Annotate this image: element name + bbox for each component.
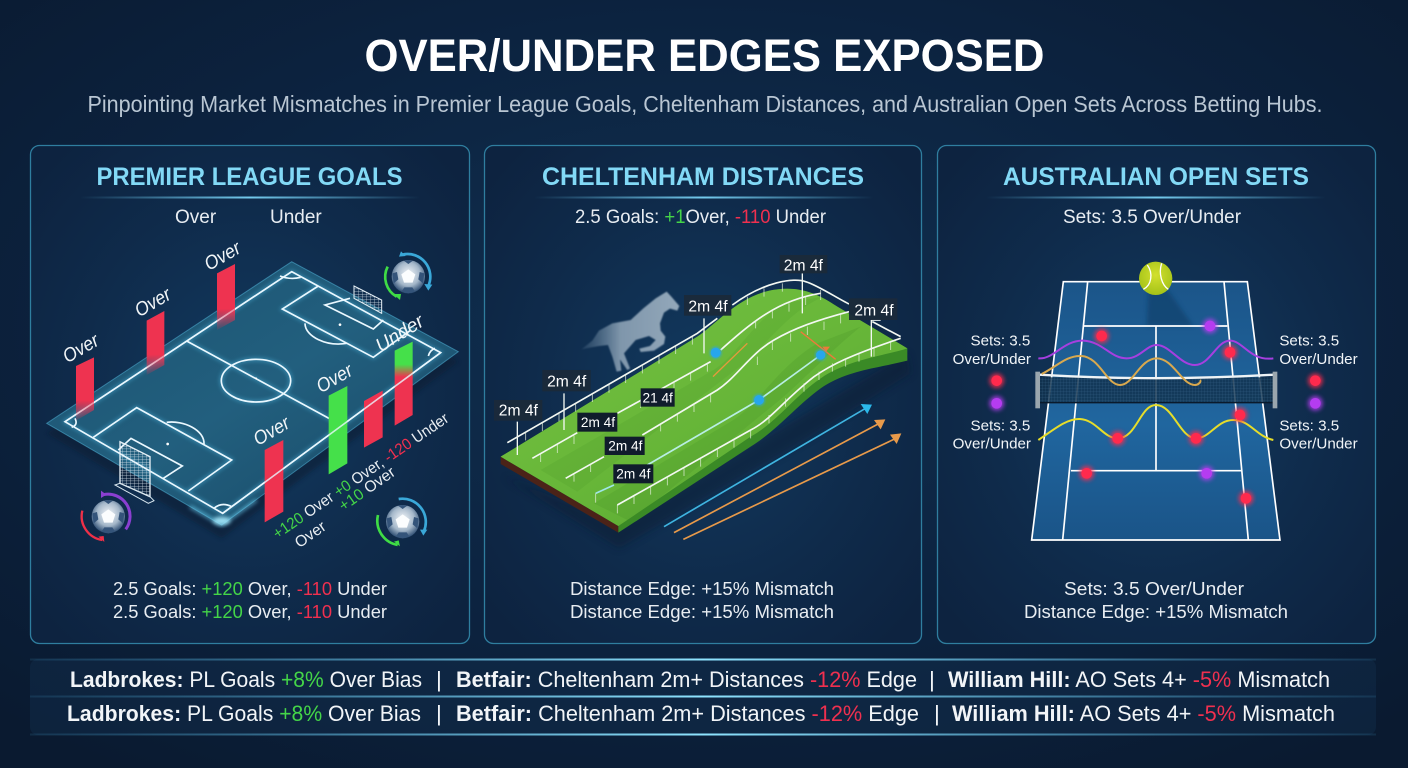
icon: tennis ball [1139, 262, 1172, 295]
footer row 2 [67, 701, 1335, 726]
racecourse diagram [494, 255, 911, 548]
racecourse diagram: 2m 4f [581, 415, 615, 430]
racecourse diagram: 2m 4f [616, 467, 651, 482]
caption: goals odds: 2.5 Goals: +120 Over, -110 Under [113, 601, 387, 622]
racecourse diagram: 2m 4f [499, 402, 539, 419]
heading: premier league goals: PREMIER LEAGUE GOALS [96, 163, 402, 191]
caption: sets and distance edge: Distance Edge: +15% Mismatch [1024, 601, 1288, 622]
bar labels: Under [372, 310, 429, 357]
footer row 1: Ladbrokes: PL Goals +8% Over Bias [70, 667, 422, 692]
footer band: bookmaker edges [30, 658, 1376, 736]
side labels: Sets: 3.5 [1279, 417, 1339, 434]
fence lines [507, 273, 901, 513]
bar labels [59, 237, 429, 450]
side labels: Over/Under [1279, 436, 1358, 453]
arrows: distance edge [664, 404, 901, 539]
bar: red middle [364, 391, 383, 448]
footer row 1: | [436, 667, 442, 692]
bar labels: Over [250, 412, 295, 450]
diagonal odds text: +10 Over [336, 464, 399, 515]
side labels: Sets: 3.5 [1279, 333, 1339, 350]
caption: goals odds [113, 578, 387, 622]
bar: over 1 [76, 357, 94, 421]
distance labels [494, 255, 897, 421]
footer row 2: | [934, 701, 940, 726]
orange pace lines [713, 332, 836, 377]
bar: under split [395, 342, 413, 426]
racecourse diagram: 2m 4f [547, 374, 587, 391]
subtitle: Pinpointing Market Mismatches in Premier League Goals, Cheltenham Distances, and Australian Open Sets Across Betting Hubs. [88, 91, 1322, 117]
caption: goals odds: 2.5 Goals: +120 Over, -110 Under [113, 578, 387, 599]
panel: premier league goals [30, 146, 470, 644]
bar labels: Over [131, 284, 176, 322]
side labels: Over/Under [1279, 351, 1358, 368]
caption: distance edge [570, 578, 834, 622]
goal: far end [354, 286, 382, 313]
side labels: Sets: 3.5 [971, 333, 1030, 350]
wave lines [1038, 341, 1273, 440]
data dots [991, 321, 1321, 504]
subheading: goals line: 2.5 Goals: +1Over, -110 Under [575, 207, 827, 228]
net [1035, 372, 1277, 408]
footer row 1: | [929, 667, 935, 692]
footer row 2: Betfair: Cheltenham 2m+ Distances -12% Edge [456, 701, 919, 726]
racecourse diagram: 21 4f [642, 391, 673, 406]
icon: soccer ball top right [385, 251, 432, 300]
bar labels: Over [313, 360, 358, 398]
bar: green over [329, 386, 347, 474]
marker dots [709, 346, 827, 407]
racecourse diagram: 2m 4f [688, 299, 728, 316]
diagonal odds text: +120 Over +0 Over, -120 Under [270, 410, 452, 543]
goal: near end [115, 442, 154, 503]
side labels: Sets: 3.5 [971, 417, 1030, 434]
caption: sets and distance edge [1024, 578, 1288, 622]
title: OVER/UNDER EDGES EXPOSED [364, 30, 1044, 81]
bar labels: Over [201, 237, 246, 275]
caption: distance edge: Distance Edge: +15% Mismatch [570, 578, 834, 599]
data dots glow [989, 319, 1323, 506]
footer row 2: William Hill: AO Sets 4+ -5% Mismatch [952, 701, 1335, 726]
footer row 2: | [436, 701, 442, 726]
caption: sets and distance edge: Sets: 3.5 Over/Under [1064, 578, 1244, 599]
diagonal odds text: Over [292, 518, 329, 552]
racecourse diagram: 2m 4f [608, 439, 643, 454]
icon: soccer ball bottom left [82, 491, 130, 542]
bar: over 4 [265, 440, 283, 522]
caption: distance edge: Distance Edge: +15% Mismatch [570, 601, 834, 622]
footer row 2: Ladbrokes: PL Goals +8% Over Bias [67, 701, 421, 726]
icon: soccer ball bottom right [377, 499, 427, 546]
bar labels: Over [59, 330, 104, 368]
track surface [501, 289, 907, 533]
footer row 1 [70, 667, 1330, 692]
racecourse diagram: 2m 4f [784, 257, 824, 274]
panel: cheltenham distances [484, 146, 922, 644]
pitch diagram [47, 237, 458, 552]
side labels: Over/Under [953, 436, 1031, 453]
side labels [953, 333, 1358, 453]
icon: horse silhouette [581, 292, 679, 372]
panel: australian open sets [938, 146, 1376, 644]
heading: australian open sets: AUSTRALIAN OPEN SETS [1003, 163, 1309, 191]
bar: over 3 [217, 264, 235, 330]
legend: over and under: Under [270, 207, 322, 228]
subheading: sets line: Sets: 3.5 Over/Under [1063, 207, 1242, 228]
tennis court diagram [953, 262, 1358, 540]
bar: over 2 [147, 311, 164, 375]
heading: cheltenham distances: CHELTENHAM DISTANCES [542, 163, 864, 191]
racecourse diagram: 2m 4f [854, 302, 894, 319]
footer row 1: William Hill: AO Sets 4+ -5% Mismatch [948, 667, 1330, 692]
legend: over and under: Over [175, 207, 217, 228]
footer row 1: Betfair: Cheltenham 2m+ Distances -12% Edge [456, 667, 917, 692]
side labels: Over/Under [953, 351, 1031, 368]
